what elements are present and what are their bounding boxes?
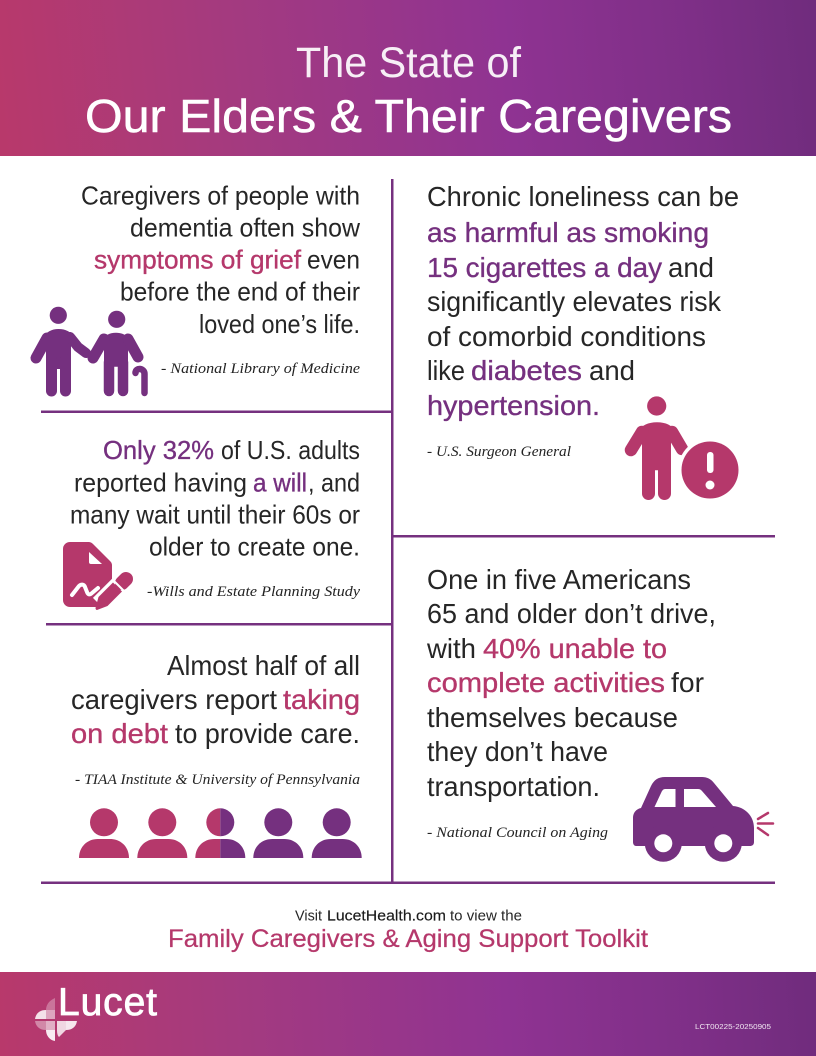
grief text block — [81, 180, 360, 339]
loneliness text block: significantly elevates risk — [427, 286, 722, 317]
call to action intro: LucetHealth.com — [327, 908, 446, 924]
panel: loneliness — [427, 181, 742, 502]
loneliness text block: and — [668, 252, 714, 283]
debt text block: caregivers report — [71, 684, 277, 715]
logo: Lucet — [35, 981, 157, 1041]
transportation text block: complete activities — [427, 667, 665, 698]
citation: U.S. Surgeon General: - U.S. Surgeon General — [427, 444, 571, 460]
footer banner — [0, 972, 816, 1056]
wills text block: older to create one. — [149, 532, 360, 562]
call to action intro: Visit — [295, 908, 323, 924]
loneliness text block: diabetes — [471, 355, 582, 386]
wills text block: many wait until their 60s or — [70, 500, 360, 530]
transportation text block: 40% unable to — [483, 633, 667, 664]
citation: TIAA Institute and University of Pennsylvania: - TIAA Institute & University of Pennsylvania — [75, 772, 360, 788]
grief text block: symptoms of grief — [94, 244, 302, 274]
wills text block: reported having — [74, 468, 247, 498]
transportation text block: One in five Americans — [427, 564, 691, 595]
dividers — [41, 179, 775, 884]
debt text block: on debt — [71, 718, 168, 749]
loneliness text block: like — [427, 355, 465, 386]
transportation text block: they don’t have — [427, 736, 608, 767]
loneliness text block: and — [589, 355, 635, 386]
wills text block: Only 32% — [103, 435, 214, 465]
debt text block: Almost half of all — [167, 650, 360, 681]
grief text block: Caregivers of people with — [81, 180, 360, 210]
call to action intro: to view the — [450, 908, 522, 924]
toolkit name: Family Caregivers & Aging Support Toolkit — [168, 925, 648, 953]
loneliness text block — [427, 181, 739, 421]
loneliness text block: as harmful as smoking — [427, 217, 709, 248]
wills text block: a will — [253, 468, 307, 498]
panel: transportation — [426, 564, 773, 862]
citation: National Council on Aging: - National Council on Aging — [427, 825, 608, 841]
debt text block: taking — [283, 684, 360, 715]
panel: grief — [36, 180, 361, 393]
loneliness text block: 15 cigarettes a day — [427, 252, 662, 283]
panel: wills — [63, 435, 361, 610]
icon: document with pen — [63, 542, 126, 610]
call to action — [168, 908, 648, 953]
loneliness text block: of comorbid conditions — [427, 321, 706, 352]
grief text block: dementia often show — [130, 212, 360, 242]
icon row: five people, half in pink — [79, 808, 362, 858]
panel: debt — [71, 650, 362, 858]
grief text block: even — [307, 244, 360, 274]
icon: two elders holding hands — [36, 307, 144, 393]
header banner — [0, 0, 816, 156]
transportation text block: for — [671, 667, 704, 698]
transportation text block: transportation. — [427, 771, 600, 802]
transportation text block — [426, 564, 716, 802]
transportation text block: 65 and older don’t drive, — [427, 598, 716, 629]
loneliness text block: hypertension. — [427, 390, 600, 421]
transportation text block: themselves because — [427, 702, 678, 733]
title line one: The State of — [296, 39, 522, 87]
document code: LCT00225-20250905 — [695, 1022, 771, 1031]
grief text block: before the end of their — [120, 276, 360, 306]
citation: National Library of Medicine: - National Library of Medicine — [161, 361, 361, 377]
citation: Wills and Estate Planning Study: -Wills and Estate Planning Study — [147, 584, 361, 600]
icon: person with alert — [631, 396, 742, 502]
wills text block: of U.S. adults — [221, 435, 360, 465]
loneliness text block: Chronic loneliness can be — [427, 181, 739, 212]
debt text block — [71, 650, 360, 749]
logo: Lucet: Lucet — [58, 981, 157, 1024]
transportation text block: with — [426, 633, 476, 664]
wills text block — [70, 435, 360, 562]
grief text block: loved one’s life. — [199, 309, 360, 339]
wills text block: , and — [308, 468, 360, 498]
icon: car with signal lines — [633, 777, 773, 862]
debt text block: to provide care. — [175, 718, 360, 749]
call to action intro — [295, 908, 522, 924]
title line two: Our Elders & Their Caregivers — [85, 90, 732, 142]
